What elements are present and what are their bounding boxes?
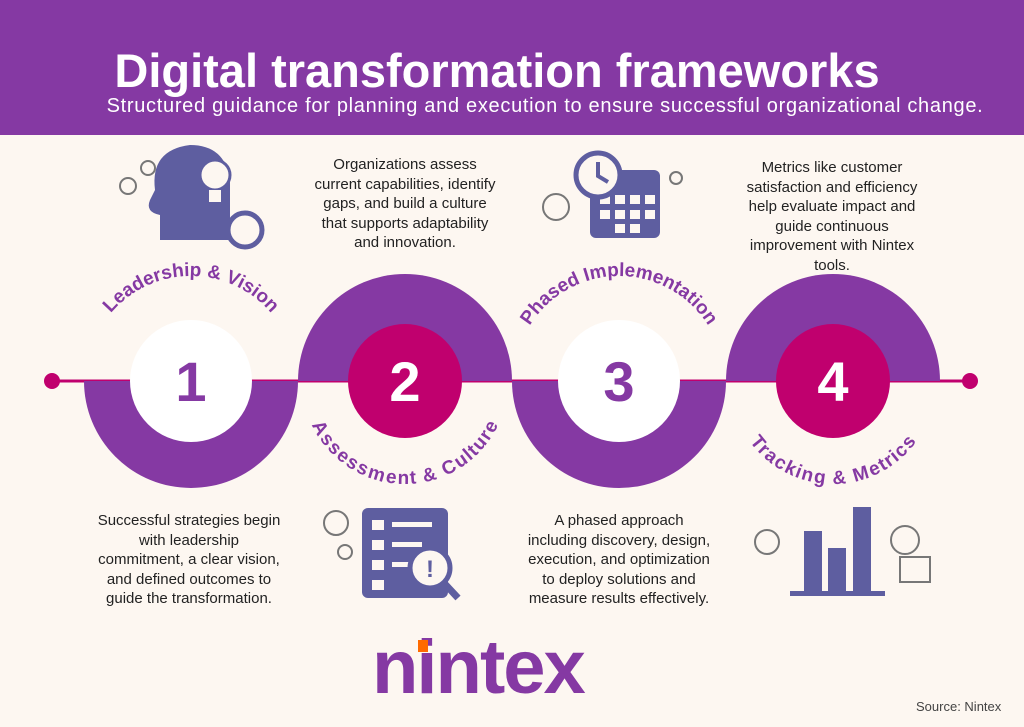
text: step 3 description: execution, and optimization bbox=[528, 551, 710, 568]
timeline line bbox=[44, 373, 978, 389]
text: step 4 description: Metrics like customer bbox=[762, 159, 902, 176]
icon: checklist with magnifier bbox=[324, 508, 458, 598]
text: step 3 description: A phased approach bbox=[554, 512, 684, 529]
step 1 ring bbox=[84, 320, 298, 488]
header banner bbox=[0, 0, 1024, 135]
text: step 2 description: and innovation. bbox=[354, 234, 456, 251]
text: step 3 description bbox=[528, 512, 710, 607]
text: step 4 description: satisfaction and efficiency bbox=[747, 178, 917, 196]
text: step 1 description bbox=[98, 512, 280, 607]
icon: checklist with magnifier: ! bbox=[426, 556, 434, 583]
text: step 1 description: with leadership bbox=[139, 532, 239, 548]
text: step 2 description bbox=[315, 156, 496, 251]
label: Phased Implementation: Phased Implementation bbox=[520, 262, 715, 325]
text: step 2 description: current capabilities, identify bbox=[315, 176, 495, 192]
logo: nintex: nintex bbox=[372, 625, 584, 710]
text: step 4 description bbox=[747, 159, 918, 274]
text: step 2 description: that supports adaptability bbox=[322, 214, 488, 232]
source note: Source: Nintex bbox=[916, 699, 1001, 714]
text: step 4 description: tools. bbox=[814, 256, 850, 274]
text: step 4 description: guide continuous bbox=[775, 218, 889, 234]
subtitle: Structured guidance for planning and execution to ensure successful organizational change. bbox=[107, 95, 983, 117]
step 4 ring bbox=[726, 274, 940, 438]
label: Tracking & Metrics: Tracking & Metrics bbox=[752, 434, 915, 488]
text: step 4 description: improvement with Nintex bbox=[750, 237, 914, 254]
label: Leadership & Vision: Leadership & Vision bbox=[102, 262, 277, 312]
step 2 ring bbox=[298, 274, 512, 438]
text: step 2 description: gaps, and build a culture bbox=[323, 195, 487, 212]
text: step 3 description: including discovery, design, bbox=[528, 532, 710, 548]
icon: head with lightbulb bbox=[120, 145, 262, 247]
icon: calendar with clock bbox=[543, 153, 682, 238]
text: step 1 description: guide the transformation. bbox=[106, 590, 272, 607]
text: step 2 description: Organizations assess bbox=[333, 156, 477, 173]
step 4 ring: 4 bbox=[817, 350, 849, 413]
text: step 1 description: Successful strategies begin bbox=[98, 512, 280, 529]
text: step 4 description: help evaluate impact and bbox=[749, 198, 915, 215]
label: Assessment & Culture: Assessment & Culture bbox=[312, 422, 497, 484]
step 3 ring: 3 bbox=[603, 350, 635, 413]
step 3 ring bbox=[512, 320, 726, 488]
text: step 3 description: to deploy solutions and bbox=[542, 570, 696, 588]
step 2 ring: 2 bbox=[389, 350, 421, 413]
title: Digital transformation frameworks bbox=[114, 44, 880, 97]
text: step 3 description: measure results effectively. bbox=[529, 590, 709, 607]
text: step 1 description: commitment, a clear vision, bbox=[98, 551, 280, 568]
icon: bar chart with gears bbox=[755, 507, 930, 596]
step 1 ring: 1 bbox=[175, 350, 207, 413]
text: step 1 description: and defined outcomes to bbox=[107, 570, 271, 588]
